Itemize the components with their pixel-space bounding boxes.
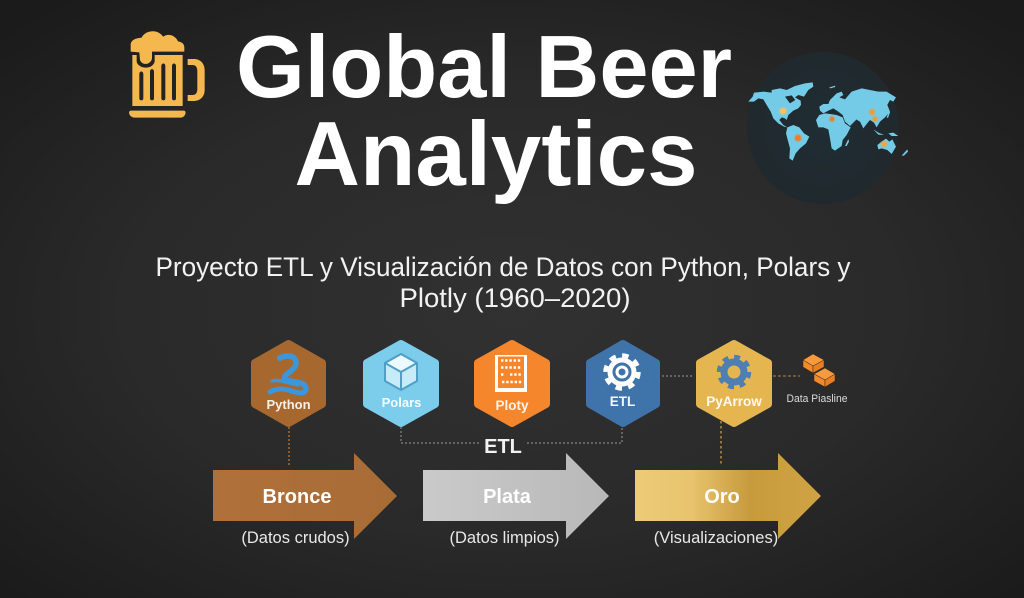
hexagon: ETL bbox=[590, 344, 656, 423]
arrow: Bronce bbox=[213, 453, 397, 539]
arrow: Bronce: Bronce bbox=[263, 486, 331, 508]
icon: gear bbox=[606, 356, 638, 388]
title: Global Beer bbox=[236, 17, 732, 116]
arrow: Plata: Plata bbox=[483, 486, 532, 508]
label: Python bbox=[266, 397, 311, 412]
label: ETL bbox=[610, 394, 635, 409]
arrow: Oro bbox=[635, 453, 821, 539]
hexagon: Polars bbox=[367, 344, 435, 423]
label: Ploty bbox=[495, 398, 529, 413]
label: data pipeline: Data Piasline bbox=[786, 393, 848, 405]
caption: Datos crudos: (Datos crudos) bbox=[241, 529, 350, 547]
hotspots bbox=[780, 108, 887, 147]
world map globe bbox=[747, 52, 908, 204]
hexagon: PyArrow bbox=[700, 344, 768, 423]
connector: PyArrow to Oro bbox=[720, 421, 722, 465]
icon: gear bbox=[719, 357, 749, 387]
continents bbox=[748, 82, 908, 161]
subtitle bbox=[156, 252, 851, 313]
icon: cube bbox=[385, 354, 417, 390]
connector: Python to Bronce bbox=[288, 427, 290, 465]
icon: beer mug bbox=[129, 31, 205, 118]
label: Polars bbox=[382, 395, 421, 410]
arrow: Plata bbox=[423, 453, 609, 539]
icon: abacus bbox=[495, 355, 527, 392]
Hudson Bay bbox=[785, 95, 795, 103]
caption: Visualizaciones: (Visualizaciones) bbox=[654, 529, 778, 547]
hexagon: Ploty bbox=[478, 344, 546, 423]
label: PyArrow bbox=[706, 394, 762, 409]
connector: PyArrow to Data Pipeline bbox=[773, 375, 800, 377]
hexagon: Python bbox=[255, 344, 322, 423]
icon: snake bbox=[270, 355, 306, 393]
title bbox=[236, 17, 732, 205]
connector: Polars to ETL bbox=[401, 376, 694, 443]
title: Analytics bbox=[294, 104, 698, 205]
caption: Datos limpios: (Datos limpios) bbox=[449, 529, 560, 547]
icon: data pipeline cubes bbox=[803, 354, 835, 387]
arrow: Oro: Oro bbox=[704, 486, 740, 508]
label: ETL: ETL bbox=[484, 436, 522, 458]
subtitle: Proyecto ETL y Visualización de Datos con Python, Polars y bbox=[156, 252, 851, 282]
subtitle: Plotly (1960–2020) bbox=[400, 283, 630, 313]
